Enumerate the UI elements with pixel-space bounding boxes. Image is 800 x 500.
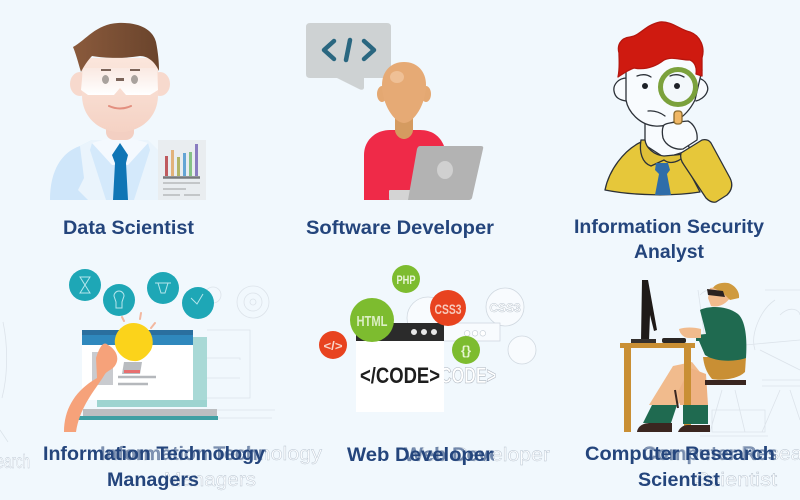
panel: information security analyst — [605, 22, 732, 202]
icon: magnified brow — [670, 75, 684, 77]
icon: eyes and brows — [101, 69, 140, 81]
icon: window header — [82, 330, 193, 345]
icon: pupils — [102, 75, 138, 84]
icon: code symbol — [324, 40, 374, 60]
icon: window header shade — [82, 330, 193, 335]
icon: tie — [112, 143, 128, 200]
icon: ears — [70, 72, 170, 96]
panel: information technology managers — [64, 269, 218, 432]
icon: face — [708, 286, 730, 307]
icon: lab coat — [78, 140, 158, 200]
icon: shorts — [703, 357, 746, 380]
icon: shirt — [605, 142, 700, 195]
label: managers: Managers — [107, 470, 199, 491]
label: computer research: Computer Research — [585, 444, 775, 465]
icon: window body — [82, 345, 193, 400]
panel: computer research scientist — [620, 280, 746, 432]
label: data scientist: Data Scientist — [63, 218, 195, 239]
ghost artwork: web developer — [377, 288, 536, 388]
ghost circle: brackets — [508, 336, 536, 364]
icon: brackets badge — [452, 336, 480, 364]
ghost label: information technology: Information Technology — [100, 444, 323, 465]
icon: tie — [655, 163, 671, 195]
icon: red accent — [124, 370, 140, 373]
icon: php badge — [392, 265, 420, 293]
ghost text: code: CODE> — [440, 363, 496, 388]
icon: near leg — [678, 368, 708, 405]
icon: monitor — [641, 280, 657, 341]
icon: shoes — [637, 423, 710, 432]
label: information technology: Information Technology — [43, 444, 265, 465]
icon: desk right leg — [684, 348, 691, 432]
icon: neck — [106, 118, 134, 140]
label overlap: web developer: Web Developer — [404, 445, 551, 466]
icon: laptop logo — [437, 161, 453, 179]
icon: shirt — [90, 143, 150, 200]
icon: laptop edge — [75, 416, 218, 420]
icon: neck — [645, 122, 690, 158]
icon: brackets badge: {} — [461, 343, 471, 358]
icon: hair — [618, 22, 703, 77]
ghost text: dots: ●●● — [463, 325, 487, 340]
icon: css3 badge: CSS3 — [434, 301, 462, 317]
icon: collar — [640, 140, 686, 166]
icon: desk left leg — [624, 348, 631, 432]
icon: code tag badge — [319, 331, 347, 359]
icon: socks — [643, 405, 708, 424]
icon: stool — [705, 380, 746, 385]
chart bars — [165, 144, 198, 176]
ghost window bar — [443, 323, 500, 341]
icon: sweater — [696, 307, 746, 361]
icon: speech bubble — [306, 23, 391, 90]
icon: eye — [642, 83, 648, 89]
icon: light bulb — [115, 323, 153, 361]
icon: neck — [395, 118, 413, 139]
icon: collar — [92, 135, 148, 165]
icon: far leg — [649, 362, 700, 405]
icon: html badge: HTML — [356, 313, 388, 330]
icon: browser body — [356, 340, 444, 412]
label: analyst: Analyst — [634, 242, 705, 263]
icon: monitor base — [631, 339, 656, 343]
icon: shirt — [364, 130, 444, 200]
icon: magnified eye — [674, 83, 680, 89]
icon: chart card — [158, 140, 206, 200]
panel: data scientist — [50, 23, 206, 200]
icon: laptop keyboard — [97, 400, 207, 407]
icon: php badge: PHP — [396, 273, 416, 287]
label: scientist: Scientist — [638, 470, 721, 491]
icon: window text lines — [118, 377, 156, 384]
ghost circle: css3 — [486, 288, 524, 326]
icon: face — [82, 58, 158, 132]
ghost text: css3: CSS3 — [489, 301, 521, 315]
ghost artwork: information technology managers — [0, 286, 275, 442]
panel: software developer — [306, 23, 483, 200]
ghost label: managers: Managers — [164, 470, 256, 491]
chart axis and text lines — [163, 176, 200, 179]
icon: browser bar — [356, 323, 444, 341]
icon: code tag badge: </> — [324, 339, 342, 353]
icon: magnifier handle — [674, 111, 682, 124]
icon: keyboard — [662, 338, 686, 343]
icon: window sidebar — [92, 352, 113, 385]
ghost circle: code tag — [377, 332, 405, 360]
ghost artwork: computer research scientist — [698, 290, 800, 436]
icon: magnifier — [660, 70, 696, 104]
icon: browser dots — [411, 329, 437, 335]
icon: sleeve — [681, 140, 732, 202]
icon: face — [626, 50, 702, 126]
icon: brows and mouth — [637, 75, 665, 116]
icon: bulb base — [122, 362, 142, 374]
icon: teal circles — [69, 269, 214, 319]
icon: smile — [109, 106, 131, 108]
label: software developer: Software Developer — [306, 218, 495, 239]
icon: lab coat sleeve — [50, 140, 92, 200]
icon: laptop base — [389, 190, 421, 200]
icon: ears — [614, 78, 708, 101]
panel: web developer — [319, 265, 480, 412]
icon: arm — [679, 328, 701, 338]
icon: head highlight — [390, 71, 404, 83]
label overlap: information technology: Information Technology — [100, 444, 322, 465]
icon: desk top — [620, 343, 695, 348]
icon: glasses — [81, 68, 158, 95]
icon: html badge — [350, 298, 394, 342]
icon: laptop bezel — [193, 337, 207, 407]
icon: hand — [662, 121, 697, 149]
icon: circle glyphs — [80, 277, 203, 308]
icon: laptop — [408, 146, 483, 200]
icon: hand and arm — [64, 344, 117, 432]
icon: laptop base — [83, 409, 217, 416]
icon: css3 badge — [430, 290, 466, 326]
icon: visor — [707, 289, 725, 297]
label: web developer: Web Developer — [347, 445, 494, 466]
text: code: </CODE> — [360, 363, 440, 388]
icon: hair — [73, 23, 159, 72]
ghost circle: html — [407, 297, 449, 339]
ghost label: web developer: Web Developer — [404, 445, 551, 466]
label: information security: Information Security — [574, 217, 764, 238]
icon: hat — [713, 283, 739, 300]
icon: leg gap — [675, 390, 678, 408]
icon: head — [382, 62, 426, 123]
ghost label: scientist: Scientist — [695, 470, 778, 491]
icon: ears — [377, 86, 431, 102]
icon: bulb rays — [122, 313, 155, 328]
